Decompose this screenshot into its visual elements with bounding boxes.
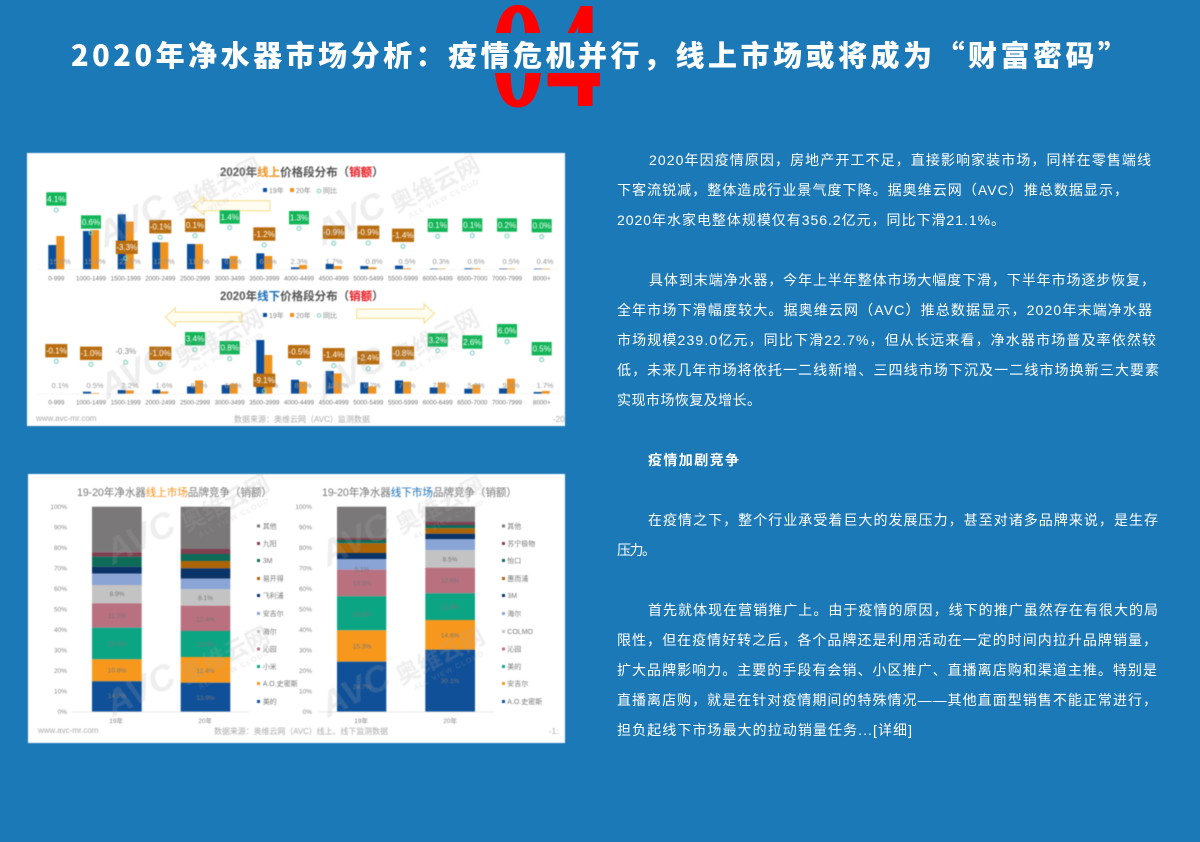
watermarks: AVC <box>91 337 177 408</box>
online value labels: 0.3% <box>432 257 450 266</box>
source footer: -20 <box>553 415 565 424</box>
watermarks: ALL VIEW CLOUD <box>191 331 265 374</box>
offline legend: 19年 <box>269 311 284 320</box>
offline axis labels: 3500-3999 <box>249 400 280 406</box>
paragraph: 2020 market overview: 下客流锐减，整体造成行业景气度下降。据奥维云网（AVC）推总数据显示， <box>617 182 1128 198</box>
watermarks: AVC <box>97 502 183 573</box>
online axis labels <box>38 270 558 282</box>
offline value labels: 7.2% <box>432 381 450 390</box>
online brand legend: 3M <box>263 558 273 565</box>
source footer: 数据来源：奥维云网（AVC）监测数据 <box>234 414 370 424</box>
online 2019 stacked bar: 10.8% <box>108 668 126 674</box>
offline brand legend: A.O.史密斯 <box>507 697 542 706</box>
paragraph: survival pressure: 压力。 <box>617 542 656 558</box>
online year-on-year tags: -0.9% <box>358 228 379 237</box>
online year-on-year tags: 0.1% <box>429 221 447 230</box>
offline year-on-year tags: 3.2% <box>429 336 447 345</box>
online value labels: 1.7% <box>325 257 343 266</box>
online brand legend: 海尔 <box>263 627 277 636</box>
online percent axis: 30% <box>54 648 67 654</box>
online axis labels: 8000+ <box>533 276 551 282</box>
source footer: www.avc-mr.com <box>35 414 97 423</box>
online value labels: 0.5% <box>398 257 416 266</box>
online legend: 19年 <box>269 186 284 195</box>
watermarks: ALL VIEW CLOUD <box>197 496 271 539</box>
offline year-on-year tags: -0.5% <box>289 348 309 356</box>
watermarks: ALL VIEW CLOUD <box>407 177 481 220</box>
paragraph: terminal water purifier market: 具体到末端净水器，今年上半年整体市场大幅度下滑，下半年市场逐步恢复， <box>649 272 1155 288</box>
paragraph: 2020 market overview <box>617 152 1151 228</box>
online 2020 stacked bar: 8.1% <box>198 595 213 602</box>
offline axis labels: 2500-2999 <box>180 400 211 406</box>
offline percent axis: 100% <box>295 504 312 511</box>
offline axis labels: 3000-3499 <box>215 400 245 406</box>
offline year-on-year tags: -0.3% <box>115 347 136 356</box>
offline value labels: 1.7% <box>536 381 554 390</box>
offline value labels: 1.6% <box>155 381 173 390</box>
offline legend <box>263 311 337 320</box>
online 2019 stacked bar: 14.8% <box>108 693 126 700</box>
online year-on-year tags: 1.4% <box>221 213 239 222</box>
offline brand legend <box>502 522 542 706</box>
offline 2019 stacked bar: 24.7% <box>353 684 371 691</box>
offline axis labels <box>38 394 558 406</box>
online percent axis <box>50 504 67 716</box>
offline percent axis: 70% <box>299 566 312 572</box>
online legend: 20年 <box>296 186 311 195</box>
panel: brand competition charts <box>28 456 565 743</box>
offline value labels: 5.8% <box>467 381 485 390</box>
offline brand chart title: 19-20年净水器线下市场品牌竞争（销额） <box>322 486 517 499</box>
offline axis labels: 1500-1999 <box>111 400 141 406</box>
watermarks: AVC <box>312 504 398 575</box>
offline year-on-year tags <box>45 324 552 387</box>
watermarks: 奥维云网 <box>387 305 484 373</box>
online 2020 stacked bar: 12.4% <box>196 616 215 624</box>
offline brand legend: 美的 <box>507 662 521 671</box>
online year-on-year tags: -1.2% <box>254 230 275 239</box>
paragraph: terminal water purifier market: 实现市场恢复及增长。 <box>617 392 761 408</box>
offline legend: 同比 <box>323 311 337 320</box>
offline brand legend: 3M <box>507 593 517 600</box>
watermarks: AVC <box>312 655 398 726</box>
paragraph: marketing promotion: 首先就体现在营销推广上。由于疫情的原因，线下的推广虽然存在有很大的局 <box>648 602 1158 618</box>
online brand legend <box>257 522 298 706</box>
offline year-on-year tags: 3.4% <box>186 334 204 344</box>
source footer: -1: <box>549 727 558 736</box>
online 2019 bars <box>48 214 542 269</box>
online brand legend: 沁园 <box>263 644 277 654</box>
offline percent axis: 10% <box>299 688 312 696</box>
watermarks: ALL VIEW CLOUD <box>197 648 271 691</box>
offline chart title: 2020年线下价格段分布（销额） <box>220 289 384 303</box>
online axis labels: 6500-7000 <box>457 276 488 282</box>
offline year-on-year tags: -0.1% <box>46 346 67 356</box>
offline 2020 stacked bar <box>425 507 475 712</box>
text block: article body <box>617 152 1159 738</box>
online percent axis: 10% <box>54 688 67 696</box>
online value labels: 6.4% <box>259 257 277 266</box>
offline 2020 stacked bar: 30.1% <box>441 678 459 685</box>
offline value labels: 0.1% <box>51 381 69 390</box>
watermarks: ALL VIEW CLOUD <box>412 498 486 541</box>
online axis labels: 2000-2499 <box>145 276 176 282</box>
offline axis labels: 4500-4999 <box>319 400 349 406</box>
online 2020 stacked bar: 13.9% <box>196 695 215 702</box>
offline percent axis: 0% <box>303 709 312 716</box>
watermarks: 奥维云网 <box>177 470 274 538</box>
watermarks: AVC <box>89 185 175 256</box>
offline value labels: 8.4% <box>294 381 312 390</box>
offline percent axis: 20% <box>299 668 312 675</box>
offline axis labels: 2000-2499 <box>145 400 176 406</box>
watermarks: AVC <box>307 337 393 408</box>
title band and heading: 2020年净水器市场分析：疫情危机并行，线上市场或将成为“财富密码” <box>71 33 1127 75</box>
online 2020 stacked bar: 12.5% <box>196 642 215 648</box>
offline 2020 stacked bar: 12.9% <box>441 604 459 611</box>
online axis labels: 4000-4499 <box>284 276 315 282</box>
online value labels: 11.8% <box>189 257 210 266</box>
online year-on-year tags: 0.6% <box>82 218 100 227</box>
online brand chart title: 19-20年净水器线上市场品牌竞争（销额） <box>77 486 272 499</box>
offline percent axis: 40% <box>299 627 312 634</box>
online percent axis: 60% <box>54 586 67 593</box>
online year-on-year tags: 0.2% <box>498 221 516 230</box>
watermarks: ALL VIEW CLOUD <box>189 179 263 222</box>
online brand legend: 安吉尔 <box>263 609 284 618</box>
offline percent axis: 50% <box>299 606 312 614</box>
offline arrow left <box>165 308 242 327</box>
offline axis labels: 1000-1499 <box>76 400 107 406</box>
online brand legend: 美的 <box>263 697 277 706</box>
online year-on-year tags: 0.1% <box>186 221 204 230</box>
offline axis labels: 5500-5999 <box>388 400 419 406</box>
online brand legend: A.O.史密斯 <box>263 679 298 688</box>
offline brand legend: 海尔 <box>507 609 521 618</box>
source footer: 数据来源：奥维云网（AVC）线上、线下监测数据 <box>214 726 388 736</box>
paragraph: marketing promotion: 扩大品牌影响力。主要的手段有会销、小区推广、直播离店购和渠道主推。特别是 <box>617 662 1157 678</box>
online 2019 stacked bar: 11.7% <box>108 613 126 620</box>
online legend: 同比 <box>323 186 337 195</box>
paragraph: 2020 market overview: 2020年水家电整体规模仅有356.2亿元，同比下滑21.1%。 <box>617 212 1005 228</box>
online percent axis: 0% <box>58 709 67 716</box>
online percent axis: 100% <box>50 504 67 511</box>
online value labels: 0.6% <box>467 257 485 266</box>
online value labels: 15.3% <box>84 257 106 266</box>
online year-on-year tags: 1.3% <box>290 214 308 222</box>
offline year-on-year tags: -2.4% <box>358 354 379 362</box>
offline axis labels: 5000-5499 <box>353 400 384 406</box>
online value labels: 12.5% <box>153 257 175 266</box>
paragraph: terminal water purifier market: 市场规模239.0亿元，同比下滑22.7%，但从长远来看，净水器市场普及率依然较 <box>617 332 1156 348</box>
watermarks: 奥维云网 <box>387 151 484 219</box>
offline value labels: 9.3% <box>502 381 520 390</box>
offline brand legend: 苏宁极物 <box>507 539 535 548</box>
online 2020 bars <box>56 222 550 269</box>
offline 2020 stacked bar: 8.5% <box>443 556 458 564</box>
offline year-on-year tags: 2.6% <box>463 338 481 347</box>
panel: price segment distribution charts <box>27 137 565 426</box>
offline axis labels: 6000-6499 <box>423 400 453 406</box>
offline value labels: 6.3% <box>224 381 242 390</box>
watermarks: 奥维云网 <box>177 622 274 690</box>
watermarks: 奥维云网 <box>392 472 489 540</box>
offline percent axis: 60% <box>299 586 312 593</box>
online year-on-year tags: -0.1% <box>150 222 171 232</box>
offline year-on-year tags: -1.0% <box>81 349 101 358</box>
offline value labels: 6.2% <box>190 381 208 390</box>
offline axis labels: 6500-7000 <box>457 400 488 406</box>
watermarks: 奥维云网 <box>392 623 489 691</box>
online axis labels: 2500-2999 <box>180 276 211 282</box>
offline 2020 stacked bar: 12.6% <box>441 578 459 584</box>
online legend <box>263 186 337 195</box>
offline year labels: 19年 <box>354 716 368 725</box>
online value labels: 2.3% <box>290 257 308 266</box>
offline value labels: 6.7% <box>363 381 381 390</box>
online percent axis: 50% <box>54 606 67 614</box>
online year-on-year tags: -1.4% <box>393 231 413 240</box>
offline percent axis <box>295 504 312 716</box>
online brand legend: 小米 <box>263 662 277 671</box>
paragraph: marketing promotion: 担负起线下市场最大的拉动销量任务...[详细] <box>617 722 912 738</box>
online 2020 stacked bar: 12.4% <box>196 668 215 675</box>
online axis labels: 3000-3499 <box>215 276 245 282</box>
watermarks: ALL VIEW CLOUD <box>412 649 486 692</box>
offline year-on-year tags: -1.4% <box>323 350 344 360</box>
offline brand legend: 怡口 <box>507 556 521 565</box>
online percent axis: 90% <box>54 524 67 532</box>
watermarks: AVC <box>97 654 183 725</box>
online year-on-year tags: 0.1% <box>463 221 481 230</box>
online year-on-year tags: -3.3% <box>116 243 137 252</box>
online axis labels: 1500-1999 <box>111 276 141 282</box>
offline brand legend: 其他 <box>507 522 521 530</box>
offline 2019 stacked bar: 13.3% <box>353 580 371 588</box>
source footer <box>35 414 565 424</box>
source footer: www.avc-mr.com <box>37 726 99 735</box>
offline brand legend: 安吉尔 <box>507 679 528 688</box>
online 2019 stacked bar: 8.9% <box>110 591 125 598</box>
online year-on-year tags: -0.9% <box>323 228 344 237</box>
online year-on-year tags: 0.0% <box>533 222 551 230</box>
offline 2019 stacked bar: 5.1% <box>355 566 370 574</box>
online chart title: 2020年线上价格段分布（销额） <box>220 165 384 179</box>
online value labels: 6.3% <box>224 257 242 266</box>
offline year-on-year rings <box>54 340 544 393</box>
offline 2019 stacked bar: 15.3% <box>353 644 371 650</box>
online 2020 stacked bar <box>181 507 230 712</box>
offline axis labels: 7000-7999 <box>492 400 523 406</box>
paragraph: terminal water purifier market: 低，未来几年市场将依托一二线新增、三四线市场下沉及一二线市场换新三大要素 <box>617 362 1159 378</box>
online year labels <box>72 712 249 725</box>
watermarks: 奥维云网 <box>171 305 268 373</box>
offline value labels: 12.5% <box>327 381 349 390</box>
offline year-on-year tags: 0.8% <box>221 344 239 352</box>
offline legend: 20年 <box>296 311 311 320</box>
offline axis labels: 0-999 <box>48 400 65 406</box>
online value labels: 0.4% <box>536 257 554 266</box>
paragraph: marketing promotion: 直播离店购，就是在针对疫情期间的特殊情况——其他直面型销售不能正常进行， <box>617 692 1157 708</box>
online value labels: 22.0% <box>119 257 141 266</box>
watermarks <box>97 456 493 734</box>
offline value labels: % <box>272 381 279 390</box>
offline axis labels: 4000-4499 <box>284 400 315 406</box>
offline 2020 stacked bar: 14.6% <box>441 632 459 640</box>
offline value labels <box>51 381 554 390</box>
online year-on-year rings <box>54 208 544 260</box>
online value labels: 0.5% <box>502 257 520 266</box>
paragraph: survival pressure: 在疫情之下，整个行业承受着巨大的发展压力，甚至对诸多品牌来说，是生存 <box>648 512 1158 528</box>
offline brand legend: 沁园 <box>507 644 521 654</box>
watermarks: 奥维云网 <box>169 153 266 221</box>
offline value labels: 0.5% <box>86 381 104 390</box>
offline 2019 stacked bar <box>337 507 386 712</box>
offline percent axis: 90% <box>299 524 312 532</box>
online axis labels: 5000-5499 <box>353 276 384 282</box>
offline 2019 bars <box>83 340 542 394</box>
offline year-on-year tags: 6.0% <box>498 326 516 336</box>
online percent axis: 70% <box>54 566 67 572</box>
online brand legend: 其他 <box>263 522 277 530</box>
paragraph: terminal water purifier market <box>617 272 1159 408</box>
offline 2019 stacked bar: 16.5% <box>353 612 371 618</box>
online axis labels: 1000-1499 <box>76 276 107 282</box>
watermarks <box>89 137 488 416</box>
online axis labels: 6000-6499 <box>423 276 453 282</box>
online brand legend: 九阳 <box>263 539 277 548</box>
offline value labels: 2.2% <box>121 381 139 390</box>
offline value labels: 7.5% <box>398 381 416 390</box>
offline brand legend: COLMO <box>507 629 534 636</box>
paragraph: marketing promotion: 限性，但在疫情好转之后，各个品牌还是利用活动在一定的时间内拉升品牌销量， <box>617 632 1157 648</box>
online year labels: 19年 <box>109 716 123 725</box>
online 2019 stacked bar: 15.3% <box>108 641 126 648</box>
offline percent axis: 80% <box>299 545 312 552</box>
offline year labels <box>318 712 494 725</box>
paragraph: 2020 market overview: 2020年因疫情原因，房地产开工不足，直接影响家装市场，同样在零售端线 <box>649 152 1151 168</box>
offline 2020 bars <box>91 355 550 394</box>
offline brand legend: 惠而浦 <box>507 574 528 583</box>
watermarks: AVC <box>307 183 393 254</box>
online year-on-year tags <box>46 192 552 254</box>
paragraph: marketing promotion <box>617 602 1158 738</box>
online axis labels: 0-999 <box>48 276 65 282</box>
online percent axis: 80% <box>54 545 67 552</box>
online axis labels: 7000-7999 <box>492 276 523 282</box>
online percent axis: 20% <box>54 668 67 675</box>
online value labels: 0.8% <box>365 257 383 266</box>
paragraph: survival pressure <box>617 512 1158 558</box>
offline percent axis: 30% <box>299 648 312 654</box>
online value labels: 15.5% <box>49 257 71 266</box>
online brand legend: 飞利浦 <box>263 591 284 600</box>
watermarks: ALL VIEW CLOUD <box>407 331 481 374</box>
online year-on-year tags: 4.1% <box>47 195 65 204</box>
online percent axis: 40% <box>54 627 67 634</box>
offline year-on-year tags: -0.8% <box>393 349 413 358</box>
online year labels: 20年 <box>198 716 212 725</box>
offline year-on-year tags: -1.0% <box>150 349 171 358</box>
paragraph: terminal water purifier market: 全年市场下滑幅度较大。据奥维云网（AVC）推总数据显示，2020年末端净水器 <box>617 302 1152 318</box>
online axis labels: 3500-3999 <box>249 276 280 282</box>
offline year labels: 20年 <box>443 716 457 725</box>
offline arrow right <box>357 304 434 323</box>
online axis labels: 5500-5999 <box>388 276 419 282</box>
online 2019 stacked bar <box>92 507 142 712</box>
offline year-on-year tags: 0.5% <box>533 344 551 354</box>
online value labels <box>49 257 554 266</box>
online arrow left <box>193 197 270 215</box>
offline year-on-year tags: -9.1% <box>254 376 275 385</box>
subheading: competition: 疫情加剧竞争 <box>648 452 739 468</box>
offline axis labels: 8000+ <box>533 400 551 406</box>
source footer <box>37 726 558 736</box>
online axis labels: 4500-4999 <box>319 276 349 282</box>
online brand legend: 易开得 <box>263 574 284 583</box>
